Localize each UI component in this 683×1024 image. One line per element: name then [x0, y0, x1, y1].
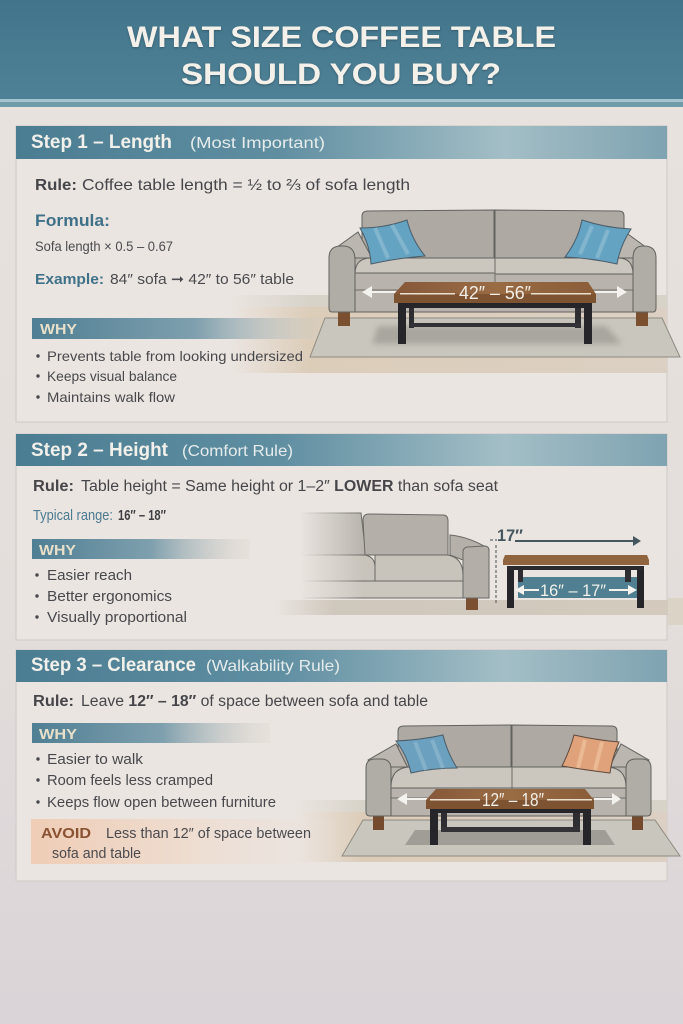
step 2 header: Step 2 – Height	[31, 440, 169, 461]
step 3 header	[16, 650, 667, 682]
step 2 header: (Comfort Rule)	[182, 443, 293, 460]
avoid callout	[31, 819, 341, 864]
step 2 why heading: WHY	[39, 542, 76, 559]
step 1 formula: Sofa length × 0.5 – 0.67	[35, 238, 173, 254]
step 2 why list: Easier reach	[47, 568, 132, 584]
height measure 17 inch: 17″	[497, 526, 523, 545]
coffee table	[426, 789, 594, 845]
illustration: sofa and table, length	[310, 210, 680, 357]
coffee table	[394, 282, 596, 344]
step 1 why list: Prevents table from looking undersized	[47, 348, 303, 364]
coffee table: 42″ – 56″	[459, 283, 532, 303]
step 3 why list: Keeps flow open between furniture	[47, 795, 276, 811]
step 3 why list	[36, 752, 276, 811]
sofa	[366, 725, 651, 830]
table height label	[515, 581, 637, 600]
step 2 why list: Visually proportional	[47, 610, 187, 626]
title	[127, 21, 556, 91]
step 1 example: Example:	[35, 271, 104, 288]
step 1 why heading: WHY	[40, 321, 77, 338]
illustration: room floor	[295, 800, 667, 862]
step 3 why heading: WHY	[39, 726, 77, 743]
floor and rug	[275, 600, 668, 615]
step 1 header: (Most Important)	[190, 135, 325, 152]
illustration: room floor	[230, 295, 667, 373]
height measure 17 inch	[490, 526, 641, 605]
sofa	[329, 210, 656, 326]
step 3 rule: Leave 12″ – 18″ of space between sofa and table	[81, 693, 428, 710]
pillow orange	[562, 735, 619, 773]
avoid callout: AVOID	[41, 825, 91, 842]
dimension arrows	[362, 286, 627, 298]
step 3 why list: Easier to walk	[47, 752, 144, 768]
step 1 why list: Keeps visual balance	[47, 368, 177, 384]
step 3 why list: Room feels less cramped	[47, 773, 213, 789]
rug	[310, 318, 680, 357]
title: SHOULD YOU BUY?	[181, 58, 501, 91]
step 2 rule: Table height = Same height or 1–2″ LOWER than sofa seat	[81, 478, 499, 495]
step 3 why heading	[32, 723, 270, 743]
coffee table: 12″ – 18″	[482, 790, 545, 810]
illustration: sofa and table, clearance	[342, 725, 680, 856]
illustration: sofa and table, height	[275, 505, 683, 625]
pillow right	[565, 220, 631, 264]
table height label: 16″ – 17″	[540, 581, 606, 600]
step 2 typical range	[33, 508, 166, 524]
sofa side view	[280, 513, 489, 610]
step 2 why heading	[32, 539, 250, 559]
step 3 header: (Walkability Rule)	[206, 658, 340, 675]
step 1 example: 84″ sofa ➞ 42″ to 56″ table	[110, 271, 294, 288]
step 2 typical range: Typical range:	[33, 508, 113, 524]
panel: step 1 length	[16, 126, 680, 422]
step 1 example	[35, 271, 294, 288]
pillow blue	[396, 735, 457, 773]
step 1 why heading	[32, 318, 330, 339]
step 1 formula: Formula:	[35, 212, 110, 230]
title: WHAT SIZE COFFEE TABLE	[127, 21, 556, 54]
coffee table side	[503, 555, 649, 608]
title banner	[0, 0, 683, 107]
step 1 header	[16, 126, 667, 159]
dimension arrows	[397, 793, 621, 805]
step 2 why list	[35, 568, 187, 626]
step 1 rule: Coffee table length = ½ to ⅔ of sofa length	[82, 177, 410, 194]
step 3 rule: Rule:	[33, 693, 74, 710]
step 2 typical range: 16″ – 18″	[118, 508, 166, 524]
step 2 why list: Better ergonomics	[47, 589, 172, 605]
step 1 formula	[35, 212, 173, 254]
step 1 rule: Rule:	[35, 177, 77, 194]
step 3 header: Step 3 – Clearance	[31, 655, 196, 676]
step 1 why list: Maintains walk flow	[47, 389, 176, 405]
avoid callout: Less than 12″ of space between	[106, 826, 311, 842]
avoid callout: sofa and table	[52, 846, 141, 862]
step 1 header: Step 1 – Length	[31, 132, 172, 153]
panel: step 3 clearance	[16, 650, 680, 881]
panel: step 2 height	[16, 434, 683, 640]
rug	[342, 820, 680, 856]
step 2 header	[16, 434, 667, 466]
pillow left	[360, 220, 425, 264]
step 2 rule: Rule:	[33, 478, 74, 495]
step 1 why list	[36, 348, 303, 405]
